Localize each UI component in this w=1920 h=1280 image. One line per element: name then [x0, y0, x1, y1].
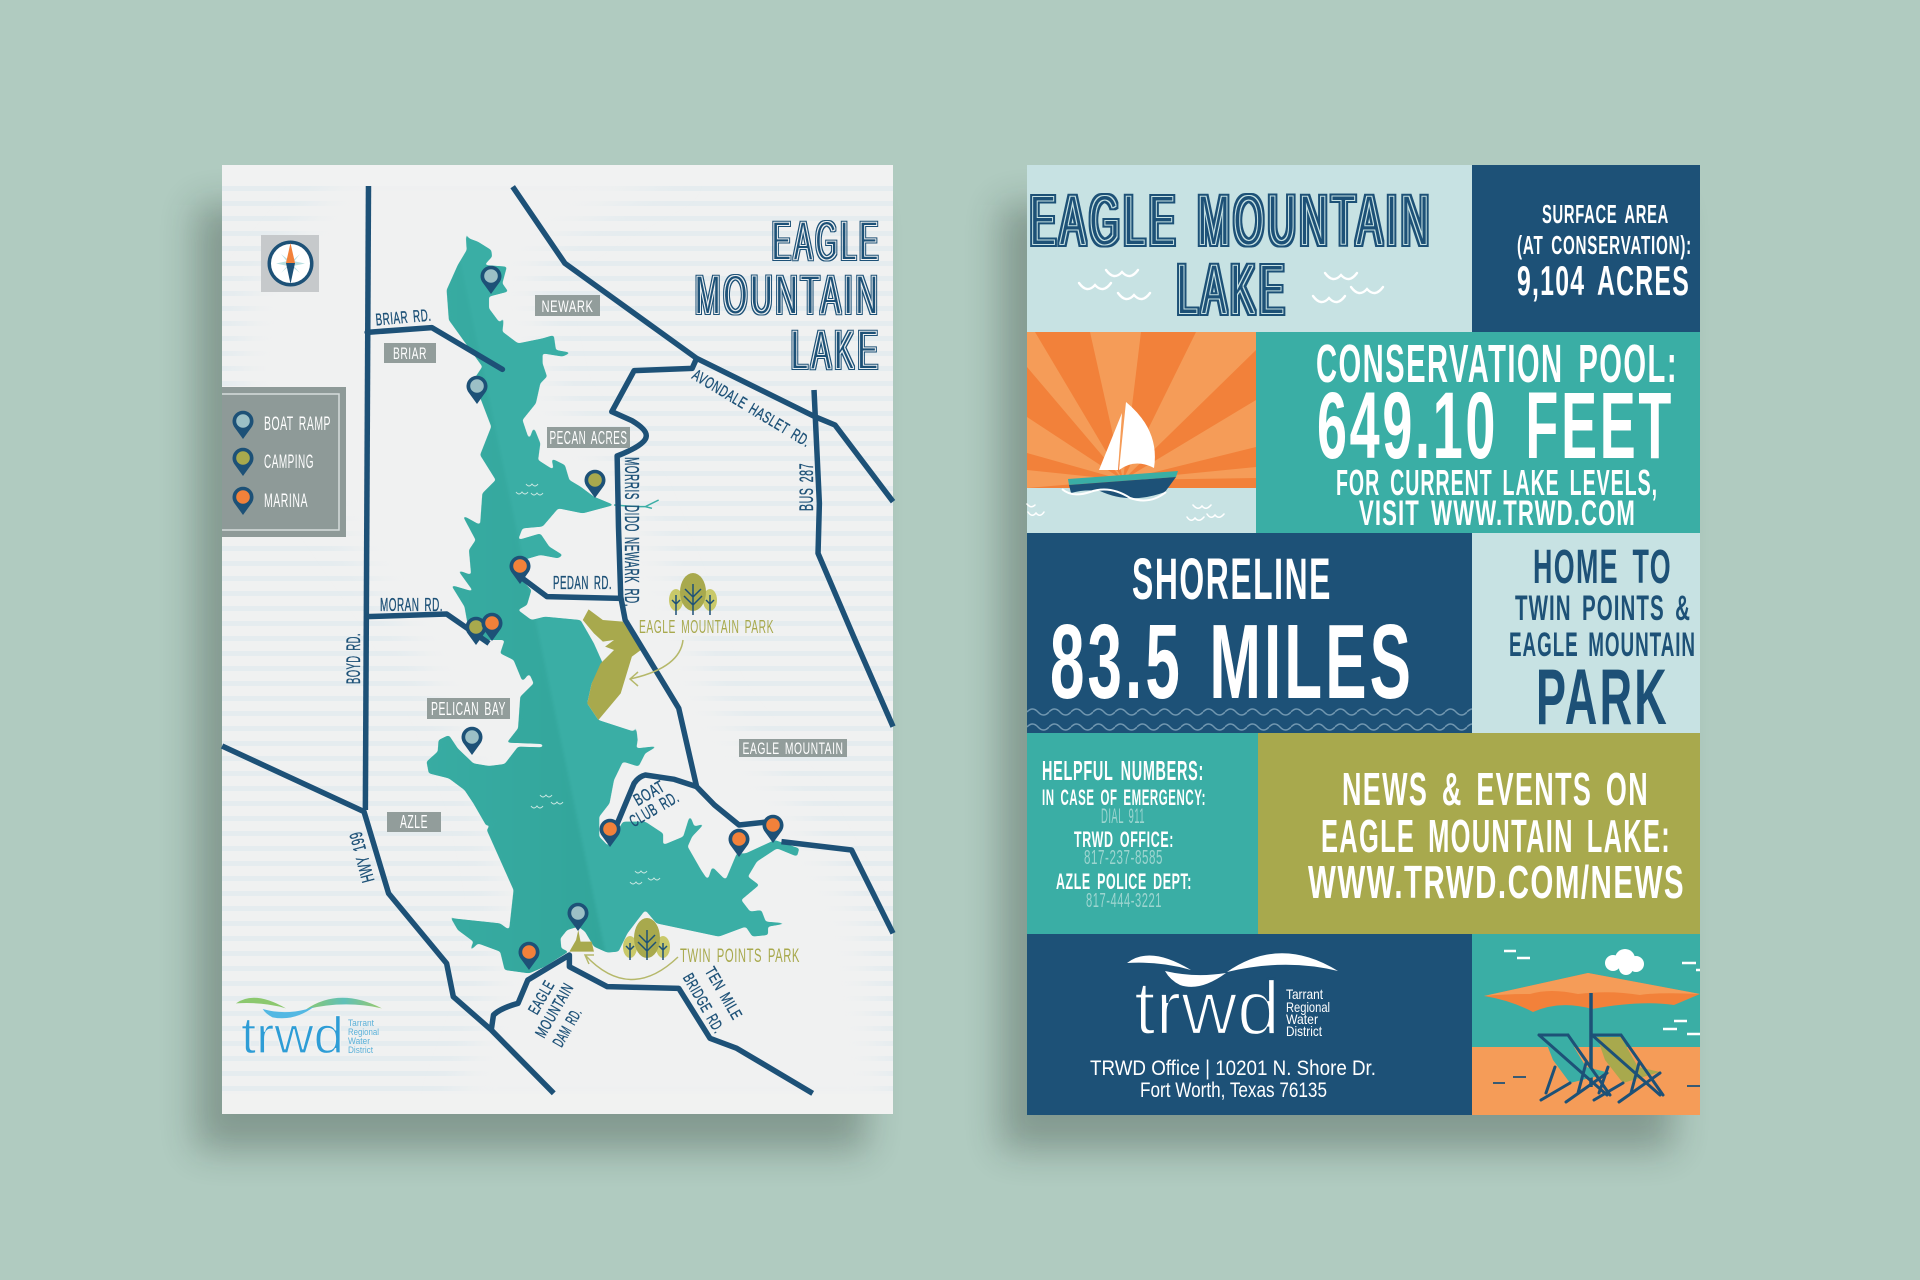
beach illustration — [1472, 934, 1700, 1115]
road labels: MORRIS DIDO NEWARK RD. — [620, 457, 642, 607]
map title — [695, 209, 881, 381]
road labels: MOUNTAIN — [533, 981, 577, 1041]
home to parks block: PARK — [1536, 652, 1669, 741]
trwd logo, map: trwd — [241, 1007, 344, 1065]
shoreline block — [1027, 533, 1472, 733]
poster drop shadows — [196, 205, 1673, 1150]
news and events block: WWW.TRWD.COM/NEWS — [1308, 856, 1685, 908]
title block: EAGLE MOUNTAIN — [1030, 182, 1433, 261]
town labels: PECAN ACRES — [550, 428, 628, 448]
surface area block — [1472, 165, 1700, 332]
road labels: CLUB RD. — [626, 788, 682, 831]
road labels: BOAT — [630, 777, 668, 810]
road labels: BRIAR RD. — [375, 306, 432, 329]
helpful numbers block: TRWD OFFICE: — [1074, 827, 1174, 852]
eagle mountain park label, trees and arrow: EAGLE MOUNTAIN PARK — [639, 617, 774, 637]
twin points park label, trees and arrow: TWIN POINTS PARK — [680, 946, 800, 967]
trwd logo, map: Regional — [348, 1027, 379, 1037]
trwd logo, white: Regional — [1286, 999, 1330, 1015]
white water marks on the lake — [516, 484, 660, 884]
legend: marina — [232, 487, 308, 515]
home to parks block: HOME TO — [1533, 541, 1672, 594]
panel: fact sheet poster — [1027, 165, 1700, 1115]
trwd logo, map: District — [348, 1045, 373, 1055]
map title: MOUNTAIN — [695, 263, 881, 326]
office and logo block: Fort Worth, Texas 76135 — [1140, 1079, 1327, 1102]
surface area block: SURFACE AREA — [1542, 199, 1669, 229]
road labels: BUS 287 — [797, 463, 818, 511]
news and events block: NEWS & EVENTS ON — [1342, 763, 1649, 815]
road labels: PEDAN RD. — [553, 573, 612, 593]
helpful numbers block: 817-237-8585 — [1084, 847, 1163, 869]
road network — [222, 186, 893, 1093]
twin points park label, trees and arrow — [585, 918, 800, 980]
legend: camping: CAMPING — [264, 452, 314, 473]
helpful numbers block: 817-444-3221 — [1086, 890, 1162, 912]
icon: beach chairs — [1539, 1035, 1663, 1102]
icon: sailboat — [1062, 402, 1178, 500]
trwd logo, white — [1127, 953, 1338, 1051]
panel: lake map poster — [222, 165, 893, 1114]
road labels: BRIDGE RD. — [679, 971, 727, 1037]
road labels: HWY 199 — [346, 829, 378, 885]
shoreline block: SHORELINE — [1132, 547, 1332, 612]
helpful numbers block: IN CASE OF EMERGENCY: — [1042, 785, 1206, 810]
eagle mountain park label, trees and arrow — [630, 573, 774, 686]
town labels: AZLE — [400, 812, 428, 832]
trwd logo, map: Water — [348, 1036, 370, 1046]
road labels: EAGLE — [526, 978, 558, 1018]
home to parks block — [1472, 533, 1700, 741]
conservation pool block: VISIT WWW.TRWD.COM — [1359, 494, 1636, 533]
helpful numbers block: HELPFUL NUMBERS: — [1042, 755, 1204, 786]
helpful numbers block: AZLE POLICE DEPT: — [1056, 869, 1192, 894]
road labels — [344, 306, 818, 1050]
road labels: BOYD RD. — [344, 633, 365, 684]
trwd logo, white: Water — [1286, 1011, 1318, 1027]
trwd logo, white: trwd — [1134, 966, 1280, 1051]
helpful numbers block — [1027, 733, 1258, 934]
town labels: NEWARK — [542, 297, 594, 316]
icon: umbrella — [1484, 973, 1700, 1087]
trwd logo, white: District — [1286, 1023, 1322, 1039]
town labels: PELICAN BAY — [431, 699, 506, 719]
icon: cloud — [1605, 949, 1644, 975]
office and logo block — [1027, 934, 1472, 1115]
map pins — [462, 266, 784, 970]
legend — [222, 387, 346, 537]
shoreline block: 83.5 MILES — [1050, 603, 1414, 721]
home to parks block: EAGLE MOUNTAIN — [1509, 626, 1696, 664]
road labels: AVONDALE HASLET RD. — [689, 367, 813, 451]
town labels — [384, 295, 847, 832]
road labels: DAM RD. — [550, 1005, 586, 1050]
town labels: BRIAR — [393, 344, 427, 363]
conservation pool block: FOR CURRENT LAKE LEVELS, — [1336, 462, 1658, 503]
surface area block: (AT CONSERVATION): — [1517, 230, 1692, 260]
icon: compass — [261, 235, 319, 292]
trwd logo, map — [236, 998, 382, 1065]
legend: camping — [232, 448, 314, 476]
conservation pool block — [1256, 332, 1700, 533]
lake body with park — [426, 236, 799, 974]
town labels: EAGLE MOUNTAIN — [742, 739, 844, 758]
title block: LAKE — [1177, 251, 1288, 330]
legend: marina: MARINA — [264, 491, 308, 512]
legend: boat ramp — [232, 411, 331, 439]
trwd logo, map: Tarrant — [348, 1018, 374, 1028]
road labels: MORAN RD. — [380, 595, 443, 615]
home to parks block: TWIN POINTS & — [1515, 589, 1691, 628]
surface area block: 9,104 ACRES — [1517, 257, 1690, 304]
helpful numbers block: DIAL 911 — [1101, 805, 1145, 828]
office and logo block: TRWD Office | 10201 N. Shore Dr. — [1090, 1057, 1376, 1080]
title block — [1027, 165, 1472, 332]
map title: EAGLE — [772, 209, 881, 272]
map title: LAKE — [791, 318, 881, 381]
sunburst with sailboat illustration — [1027, 332, 1256, 533]
trwd logo, white: Tarrant — [1286, 986, 1323, 1002]
legend: boat ramp: BOAT RAMP — [264, 414, 331, 435]
road labels: TEN MILE — [701, 964, 745, 1023]
news and events block — [1258, 733, 1700, 934]
